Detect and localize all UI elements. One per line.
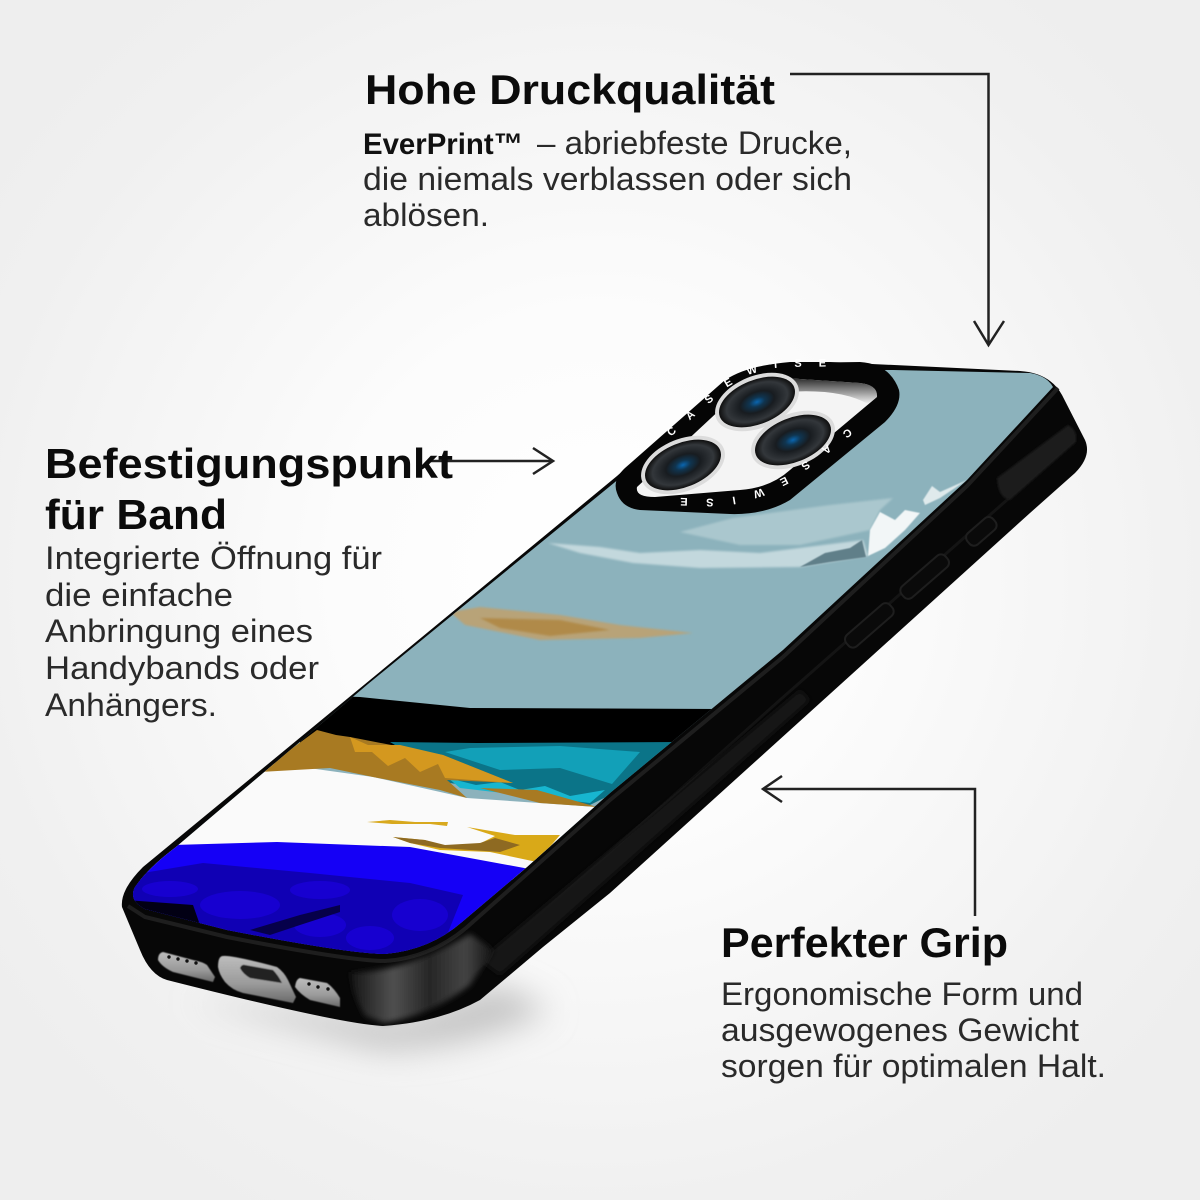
white paint clouds (868, 510, 920, 556)
arrow: strap attachment (430, 448, 553, 474)
light teal paint (445, 746, 640, 784)
gold paint highlight (350, 737, 513, 783)
brown fleck lower (393, 837, 520, 852)
camera plate (637, 378, 877, 497)
arrow: grip (763, 776, 975, 916)
text block: strap attachment (45, 440, 453, 723)
blue paint (132, 842, 526, 954)
body line one: – abriebfeste Drucke, (537, 125, 852, 161)
blue brush dabs (142, 881, 448, 950)
arrow: print quality (790, 74, 1004, 345)
grip line two: ausgewogenes Gewicht (721, 1012, 1079, 1048)
heading: grip: Perfekter Grip (721, 919, 1008, 966)
grip line three: sorgen für optimalen Halt. (721, 1048, 1106, 1084)
grip line one: Ergonomische Form und (721, 976, 1083, 1012)
phone with case (122, 362, 1088, 1027)
white section (140, 763, 595, 880)
heading line two: für Band (45, 491, 227, 538)
strap line one: Integrierte Öffnung für (45, 540, 382, 576)
printed artwork (132, 370, 1053, 954)
heading: strap attachment: Befestigungspunkt (45, 440, 453, 487)
black paint patch (135, 900, 200, 923)
small gold flecks (367, 820, 448, 826)
teal paint (390, 742, 680, 805)
light teal strip (448, 778, 605, 803)
brown brush core (480, 618, 610, 636)
gold paint second (480, 788, 597, 807)
lens upper (706, 361, 808, 443)
strap line four: Handybands oder (45, 650, 319, 686)
teal base (132, 370, 1053, 954)
speaker left (158, 952, 215, 982)
side button small (964, 515, 999, 548)
plate top shading (785, 378, 877, 404)
case body (122, 362, 1087, 1026)
ring brand text top: CASEWISE (668, 362, 826, 436)
text block: grip (721, 919, 1106, 1084)
text block: print quality (363, 66, 852, 233)
dark blue paint (120, 863, 463, 960)
strap line two: die einfache (45, 577, 233, 613)
deep blue shadow (250, 905, 340, 935)
speaker right (295, 978, 340, 1007)
black band (300, 696, 712, 745)
lens right (742, 399, 844, 481)
gold paint main (260, 730, 513, 798)
charging port (218, 956, 296, 1003)
side switch (997, 425, 1076, 500)
heading: print quality: Hohe Druckqualität (365, 66, 775, 113)
gold paint lower (393, 827, 560, 862)
dark paint patch (800, 540, 866, 567)
camera ring (616, 362, 900, 514)
white paint fleck (923, 480, 967, 505)
lens left (632, 424, 734, 506)
corner highlight (350, 934, 494, 1023)
brown brush stroke (450, 607, 693, 640)
lower side texture (480, 690, 810, 975)
pale brush streak lower (548, 540, 868, 568)
body line: EverPrint: EverPrint™ (363, 128, 523, 161)
ring brand text bottom: CASEWISE (680, 430, 852, 506)
side groove (470, 440, 1075, 975)
strap line five: Anhängers. (45, 687, 217, 723)
strap line three: Anbringung eines (45, 613, 313, 649)
side button lower (843, 601, 896, 650)
side button upper (898, 552, 951, 601)
case inner rim (128, 388, 1058, 961)
body line two: die niemals verblassen oder sich (363, 161, 852, 197)
phone shadow (190, 985, 550, 1050)
body line three: ablösen. (363, 197, 489, 233)
pale brush streak upper (680, 498, 893, 545)
